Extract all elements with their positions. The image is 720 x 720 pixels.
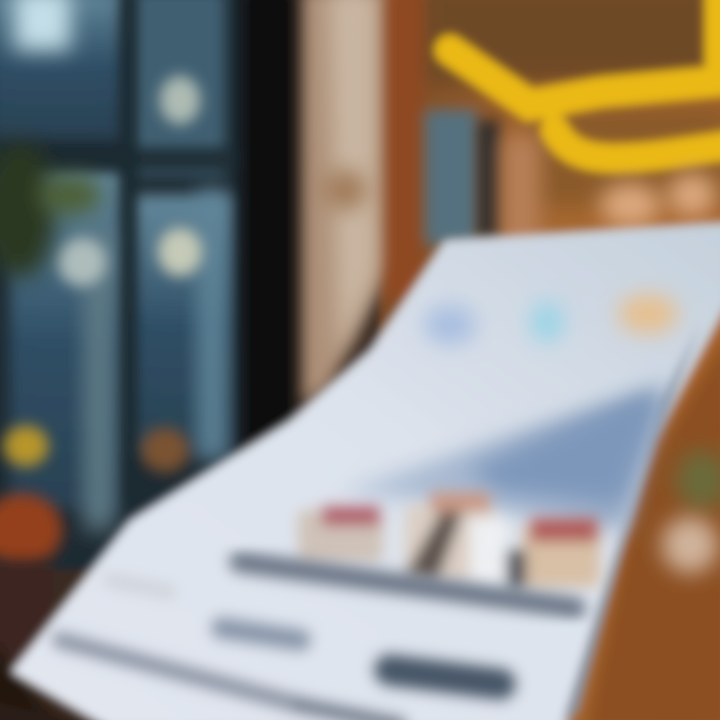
sheet edge shadow <box>0 700 110 720</box>
window with blue panes <box>0 0 297 570</box>
chart baseline <box>240 562 575 608</box>
warm highlights under beams <box>600 173 716 227</box>
text placeholder bars <box>60 580 500 720</box>
paper sheet <box>10 222 720 720</box>
lower left dark corner <box>0 640 60 720</box>
chart bars <box>298 492 600 588</box>
table wood at lower right <box>585 330 720 720</box>
sheet icons <box>424 294 678 345</box>
chart area <box>340 385 665 530</box>
central door panel <box>303 0 422 405</box>
plant and pot at left <box>0 142 102 660</box>
blue window strip <box>425 110 540 245</box>
yellow beams <box>450 0 720 158</box>
